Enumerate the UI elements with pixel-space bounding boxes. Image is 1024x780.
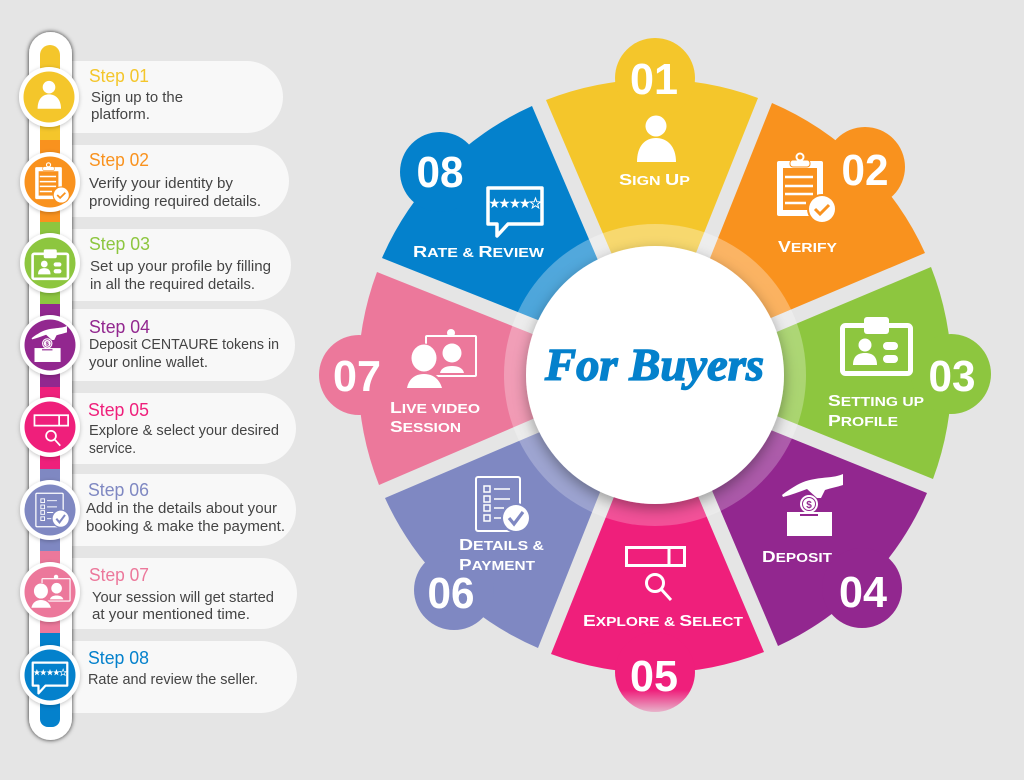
step 01 card: platform. [91,106,150,123]
step 01 card [50,61,283,133]
badge 03 [20,233,80,293]
number 06: 06 [428,569,474,618]
timeline rail [29,32,72,740]
number 05: 05 [630,652,678,701]
segment 08 rate and review [382,106,641,361]
label setting up profile: PROFILE [828,413,898,430]
step 04 card: your online wallet. [89,354,208,371]
step 05 card: Explore & select your desired [89,422,279,439]
step 06 card: booking & make the payment. [86,518,285,535]
step 04 card: Step 04 [89,317,150,337]
label details and payment: DETAILS & [459,537,544,554]
step 02 card [50,145,289,217]
step 02 card: Step 02 [89,150,149,170]
segment 02 verify [669,103,925,361]
step 08 card: Step 08 [88,648,149,668]
number 02: 02 [842,146,888,195]
step 06 card: Step 06 [88,480,149,500]
step 07 card [50,558,297,629]
icon: hand depositing coin: $ [806,500,812,511]
label verify: VERIFY [778,239,837,256]
segment 05 explore and select [551,395,764,712]
number 01: 01 [630,55,678,104]
icon: search bar [626,547,684,600]
icon: checklist [476,477,531,533]
step 05 card: service. [89,440,136,457]
step 04 card [50,309,295,381]
label explore and select: EXPLORE & SELECT [583,613,743,630]
icon: review speech bubble [488,188,542,236]
step 04 card: Deposit CENTAURE tokens in [89,336,279,353]
number 07: 07 [333,352,381,401]
segment 07 live video session [319,272,635,485]
badge 07 [20,562,80,622]
step 03 card [50,229,291,301]
label details and payment [459,537,544,574]
step 05 card: Step 05 [88,400,149,420]
label live video session: LIVE VIDEO [390,400,480,417]
label setting up profile: SETTING UP [828,393,924,410]
step 03 card: Set up your profile by filling [90,258,271,275]
number 08: 08 [416,148,464,197]
step 08 card [50,641,297,713]
centre disc with title [526,246,784,504]
step 08 card: Rate and review the seller. [88,671,258,688]
badge 04 [20,315,80,375]
step 07 card: Your session will get started [92,589,274,606]
label live video session: SESSION [390,419,461,436]
title: For Buyers [544,339,764,390]
badge 08 [20,645,80,705]
badge 01 [19,67,79,127]
label live video session [390,400,480,436]
step 03 card: Step 03 [89,234,150,254]
translucent ring [504,224,806,526]
step 06 card: Add in the details about your [86,500,277,517]
step badges [19,67,80,705]
step 03 card: in all the required details. [90,276,255,293]
icon: hand depositing coin [782,474,843,536]
segment 01 sign up [546,38,758,355]
icon: id card [842,317,910,374]
panel: step list [50,61,297,713]
segment 03 setting up profile [675,267,991,479]
badge 05 [20,397,80,457]
label rate and review: RATE & REVIEW [413,244,545,261]
icon: clipboard [777,154,837,224]
badge 02 [20,152,80,212]
label sign up: SIGN UP [619,172,690,189]
label setting up profile [828,393,924,430]
icon: video call [405,329,476,389]
step 02 card: providing required details. [89,193,261,210]
badge 06 [20,480,80,540]
segment 04 deposit [669,389,927,646]
step 06 card [50,474,296,546]
step 01 card: Step 01 [89,66,149,86]
segment 06 details and payment [385,389,641,648]
step 05 card [50,393,296,464]
step 07 card: Step 07 [89,565,149,585]
icon: user [637,116,676,162]
step 01 card: Sign up to the [91,89,183,106]
step 02 card: Verify your identity by [89,175,233,192]
panel: wheel [319,38,991,712]
label deposit: DEPOSIT [762,549,832,566]
step 07 card: at your mentioned time. [92,606,250,623]
number 03: 03 [928,352,976,401]
number 04: 04 [839,568,888,617]
label details and payment: PAYMENT [459,557,535,574]
